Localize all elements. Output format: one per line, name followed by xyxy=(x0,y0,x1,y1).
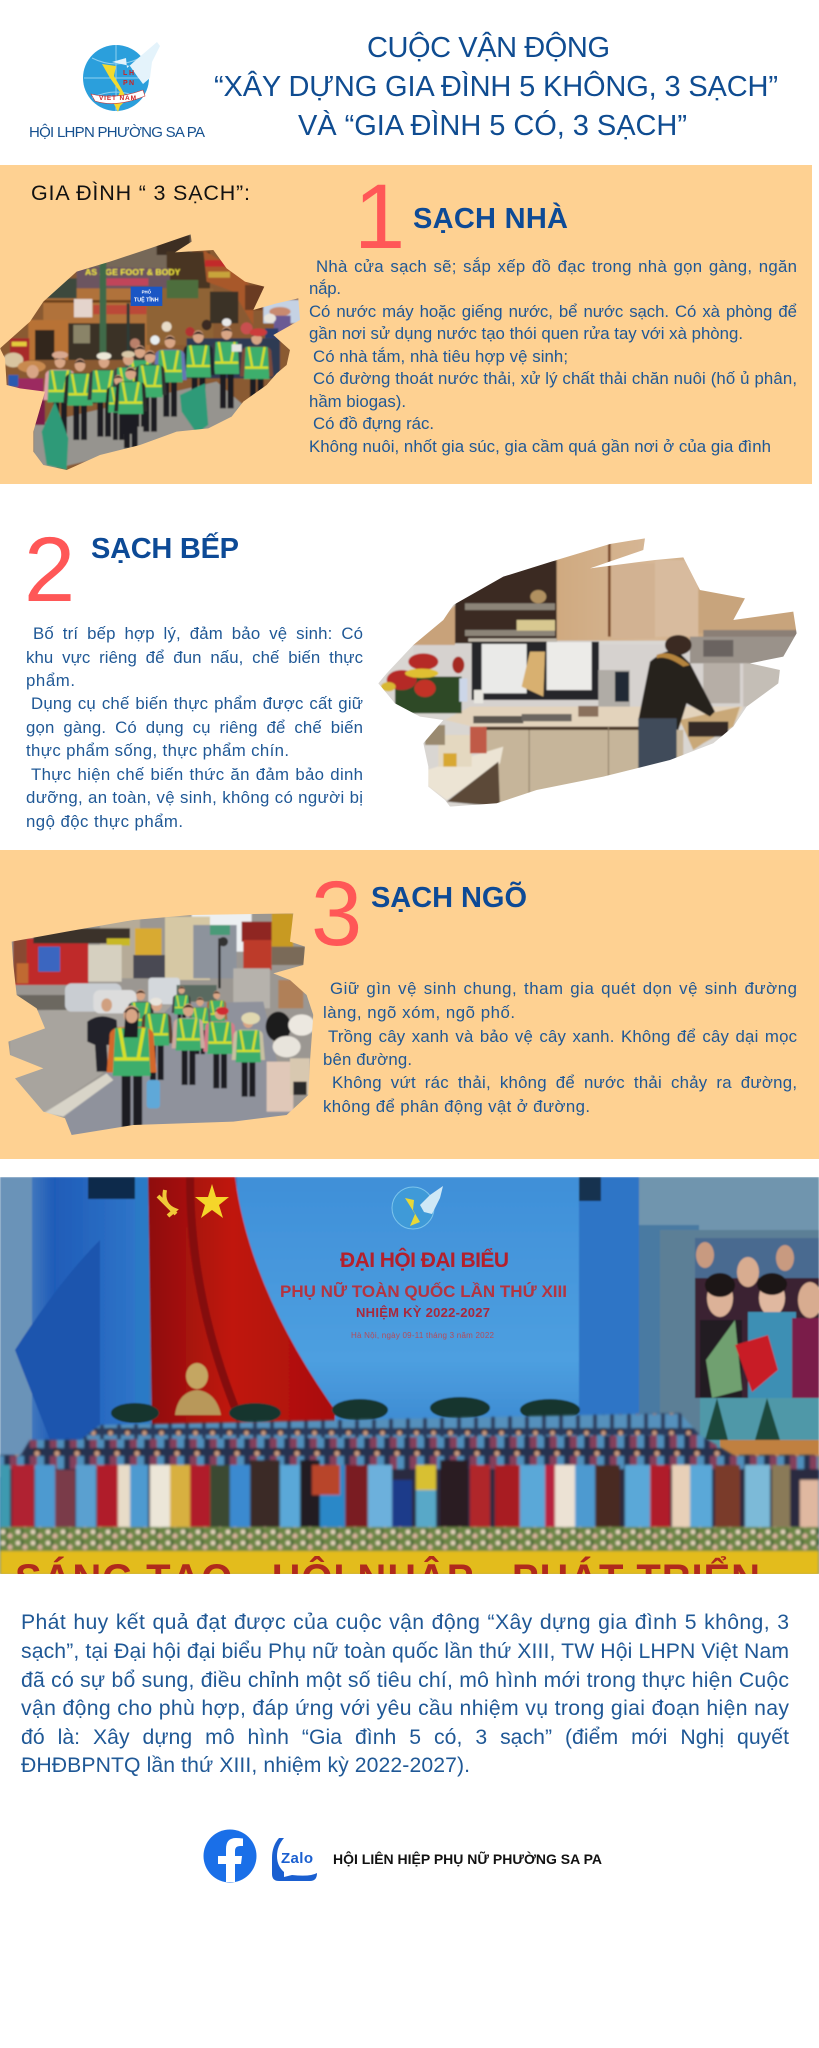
heading: sạch ngõ: SẠCH NGÕ xyxy=(371,880,527,914)
street sign: PHỐ xyxy=(142,289,152,294)
title: “XÂY DỰNG GIA ĐÌNH 5 KHÔNG, 3 SẠCH” xyxy=(214,69,778,103)
body text: sạch bếp xyxy=(26,624,363,831)
body text: sạch nhà: Có đồ đựng rác. xyxy=(313,414,434,433)
body text: sạch nhà: Có đường thoát nước thải, xử lý chất thải chăn nuôi (hố ủ phân, xyxy=(313,369,797,388)
heading: sạch bếp: SẠCH BẾP xyxy=(91,531,239,565)
closing paragraph: đã có sự bổ sung, điều chỉnh một số tiêu chí, mô hình mới trong thực hiện Cuộc xyxy=(21,1669,789,1692)
body text: sạch nhà: Có nước máy hoặc giếng nước, bể nước sạch. Có xà phòng để xyxy=(309,302,797,321)
body text: sạch bếp: dưỡng, an toàn, vệ sinh, không có người bị xyxy=(26,788,363,807)
body text: sạch bếp: phẩm. xyxy=(26,671,75,690)
body text: sạch nhà: Không nuôi, nhốt gia súc, gia cầm quá gần nơi ở của gia đình xyxy=(309,437,771,456)
street sign xyxy=(131,287,162,306)
body text: sạch ngõ: Giữ gìn vệ sinh chung, tham gia quét dọn vệ sinh đường xyxy=(330,979,797,998)
screen text: PHỤ NỮ TOÀN QUỐC LẦN THỨ XIII xyxy=(280,1281,567,1301)
icon: LHPN logo: PN xyxy=(123,80,134,87)
panel: sạch ngõ xyxy=(0,850,819,1159)
title xyxy=(214,30,778,142)
icon: zalo xyxy=(272,1838,317,1881)
body text: sạch ngõ: làng, ngõ xóm, ngõ phố. xyxy=(323,1003,515,1022)
icon: zalo: Zalo xyxy=(281,1850,313,1867)
closing paragraph: ĐHĐBPNTQ lần thứ XIII, nhiệm kỳ 2022-2027). xyxy=(21,1754,470,1777)
number 2: 2 xyxy=(24,519,75,621)
body text: sạch nhà: nắp. xyxy=(309,279,341,298)
body text: sạch nhà: hầm biogas). xyxy=(309,392,406,411)
body text: sạch bếp: ngộ độc thực phẩm. xyxy=(26,812,183,831)
screen text: Hà Nội, ngày 09-11 tháng 3 năm 2022 xyxy=(351,1331,495,1340)
footer xyxy=(204,1830,602,1882)
icon: facebook xyxy=(204,1830,256,1882)
body text: sạch nhà: Nhà cửa sạch sẽ; sắp xếp đồ đạc trong nhà gọn gàng, ngăn xyxy=(316,257,797,276)
body text: sạch bếp: thực phẩm sống, thực phẩm chín. xyxy=(26,741,289,760)
closing paragraph: sạch”, tại Đại hội đại biểu Phụ nữ toàn quốc lần thứ XIII, TW Hội LHPN Việt Nam xyxy=(21,1640,789,1663)
closing paragraph xyxy=(21,1611,789,1777)
street sign: TUỆ TĨNH xyxy=(134,296,159,304)
number 1: 1 xyxy=(354,166,405,268)
body text: sạch nhà: gần nơi sử dụng nước tạo thói quen rửa tay với xà phòng. xyxy=(309,324,743,343)
title: CUỘC VẬN ĐỘNG xyxy=(367,30,610,64)
photo: volunteers on street xyxy=(0,225,310,475)
body text: sạch ngõ: không để phân động vật ở đường. xyxy=(323,1097,590,1116)
crowd on stage xyxy=(0,1413,819,1575)
logo caption: HỘI LHPN PHƯỜNG SA PA xyxy=(29,124,205,141)
photo: volunteers on street: AS AGE FOOT & BODY xyxy=(85,267,181,277)
panel heading: gia đình 3 sạch: GIA ĐÌNH “ 3 SẠCH”: xyxy=(31,180,250,205)
closing paragraph: Phát huy kết quả đạt được của cuộc vận động “Xây dựng gia đình 5 không, 3 xyxy=(21,1611,789,1634)
panel: sạch nhà xyxy=(0,165,812,484)
screen text: ĐẠI HỘI ĐẠI BIỂU xyxy=(340,1248,509,1272)
heading: sạch nhà: SẠCH NHÀ xyxy=(413,201,568,235)
congress screen logo xyxy=(392,1186,443,1229)
title: VÀ “GIA ĐÌNH 5 CÓ, 3 SẠCH” xyxy=(298,109,687,142)
photo: street cleaning xyxy=(8,914,314,1135)
icon: LHPN logo: VIET NAM xyxy=(99,95,136,102)
body text: sạch bếp: Dụng cụ chế biến thực phẩm được cất giữ xyxy=(31,694,363,713)
screen text xyxy=(280,1248,567,1340)
body text: sạch bếp: khu vực riêng để đun nấu, chế biến thực xyxy=(26,648,363,667)
icon: LHPN logo xyxy=(83,42,160,112)
body text: sạch ngõ: Không vứt rác thải, không để nước thải chảy ra đường, xyxy=(332,1073,797,1092)
body text: sạch ngõ: bên đường. xyxy=(323,1050,412,1069)
stage slogan: SÁNG TẠO - HỘI NHẬP - PHÁT TRIỂN xyxy=(15,1554,760,1601)
body text: sạch bếp: Thực hiện chế biến thức ăn đảm bảo dinh xyxy=(31,765,363,784)
body text: sạch nhà xyxy=(309,257,797,456)
body text: sạch ngõ xyxy=(323,979,797,1116)
number 3: 3 xyxy=(311,863,362,965)
body text: sạch ngõ: Trồng cây xanh và bảo vệ cây xanh. Không để cây dại mọc xyxy=(328,1027,797,1046)
closing paragraph: đó là: Xây dựng mô hình “Gia đình 5 có, 3 sạch” (điểm mới Nghị quyết xyxy=(21,1726,789,1749)
photo: kitchen xyxy=(378,538,796,806)
screen text: NHIỆM KỲ 2022-2027 xyxy=(356,1305,490,1320)
body text: sạch bếp: Bố trí bếp hợp lý, đảm bảo vệ sinh: Có xyxy=(33,624,363,643)
panel: sạch bếp xyxy=(24,519,805,831)
header xyxy=(29,30,778,142)
closing paragraph: vận động cho phù hợp, đáp ứng với yêu cầu nhiệm vụ trong giai đoạn hiện nay xyxy=(21,1697,789,1720)
photo: women's congress stage xyxy=(0,1177,819,1601)
icon: LHPN logo: LH xyxy=(123,70,134,77)
footer organisation name: HỘI LIÊN HIỆP PHỤ NỮ PHƯỜNG SA PA xyxy=(333,1850,602,1867)
body text: sạch nhà: Có nhà tắm, nhà tiêu hợp vệ sinh; xyxy=(313,347,568,366)
body text: sạch bếp: gọn gàng. Có dụng cụ riêng để chế biến xyxy=(26,718,363,737)
hammer and sickle, star xyxy=(158,1184,229,1218)
